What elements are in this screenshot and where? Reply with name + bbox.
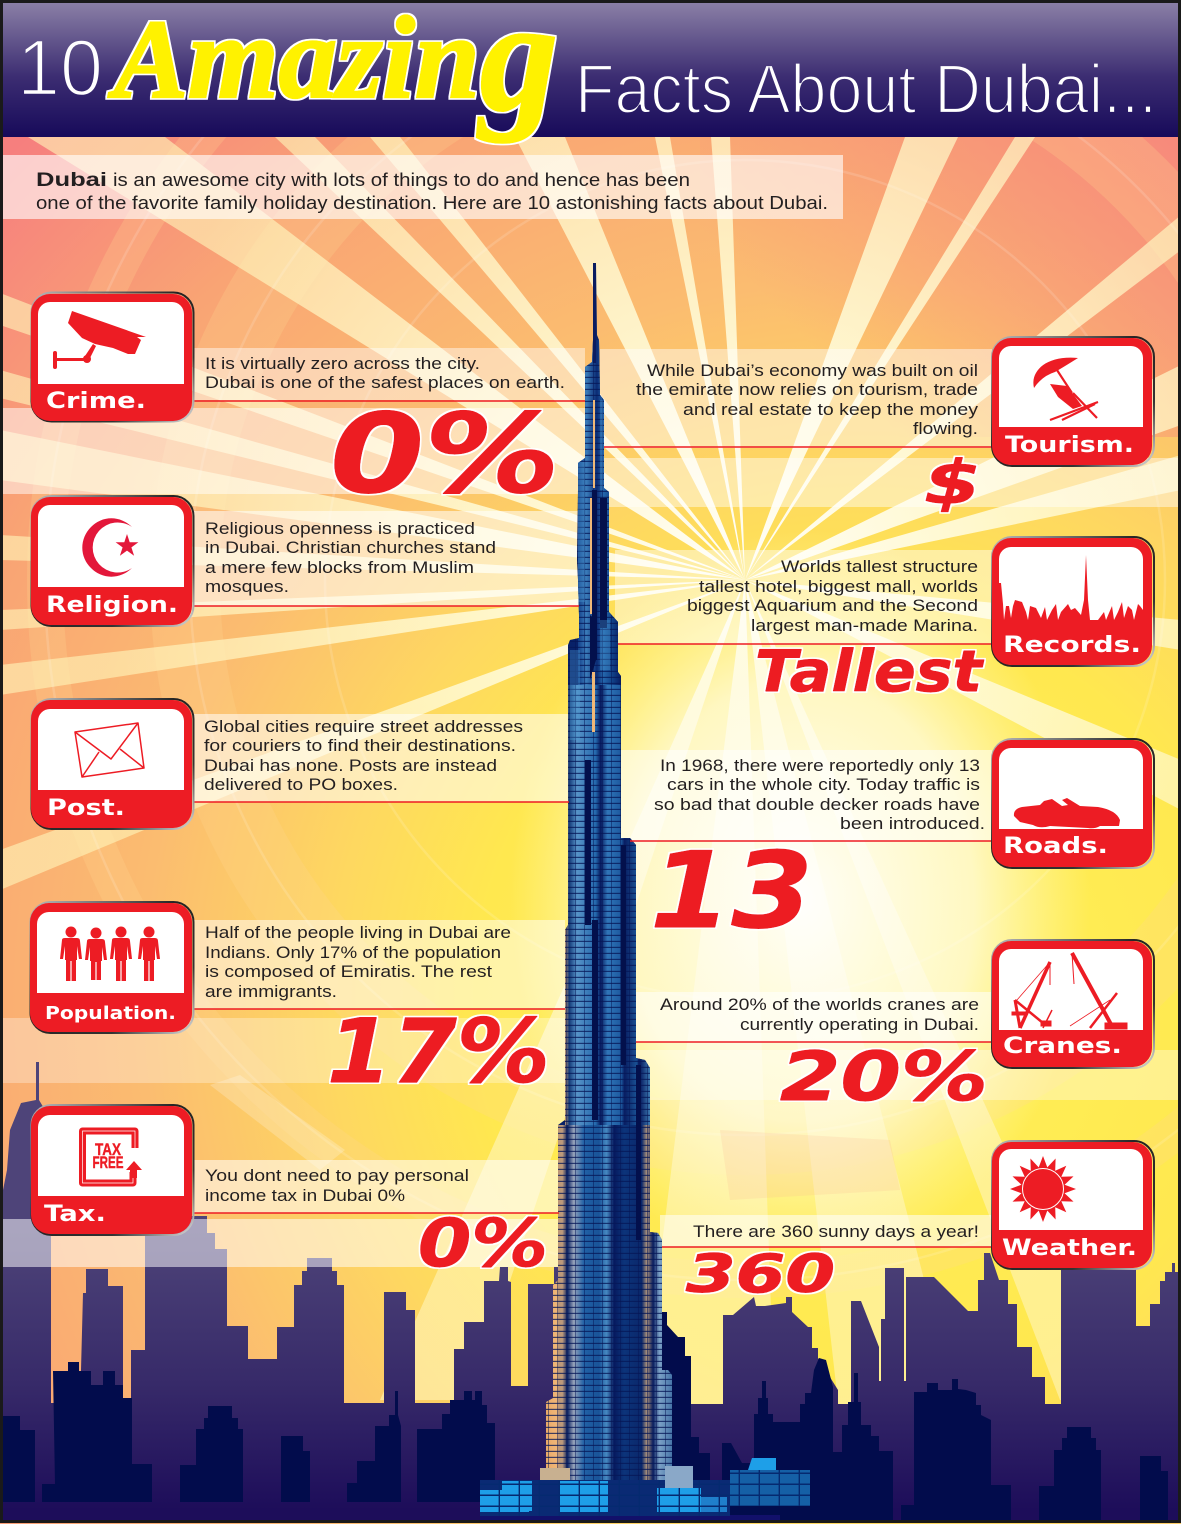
skyline: back buildings [3,1062,1181,1520]
icon: crescent and star [82,518,138,577]
icon: tax free: TAX [95,1140,122,1159]
badge: Tax [31,1105,194,1235]
big number: tourism dollar: $ [924,448,981,518]
post text: for couriers to find their destinations. [204,736,516,755]
crime text [205,354,565,392]
intro text: one of the favorite family holiday destination. Here are 10 astonishing facts about Dubai. [36,192,828,213]
badge: Population [30,902,194,1033]
big number: crime 0%: 0% [330,390,560,518]
records text: biggest Aquarium and the Second [687,596,978,615]
crime text: Dubai is one of the safest places on earth. [205,373,565,392]
title: 10 [17,23,103,112]
icon: beach umbrella and chair [1033,358,1098,420]
icon: convertible car [1014,798,1120,828]
post text: delivered to PO boxes. [204,775,398,794]
big number: tax 0%: 0% [418,1205,548,1282]
badge: Tourism [992,337,1154,466]
translucent text strips [3,155,1181,1247]
icon: tax free [82,1131,142,1183]
tax text: income tax in Dubai 0% [205,1186,405,1205]
title [17,0,1157,144]
label: Roads: Roads. [1003,834,1108,859]
skyline haze band [3,1219,559,1267]
badge: Crime [31,292,194,422]
crime text: It is virtually zero across the city. [205,354,480,373]
label: Records: Records. [1003,633,1141,658]
badge: Religion [31,496,194,626]
post text [204,717,523,794]
population text: Half of the people living in Dubai are [205,923,511,942]
label: Cranes: Cranes. [1003,1034,1122,1059]
label: Religion: Religion. [46,593,178,618]
population text: are immigrants. [205,982,337,1001]
intro text [36,169,828,213]
label: Population: Population. [45,1003,176,1024]
intro text: is an awesome city with lots of things to do and hence has been [113,169,690,190]
badge: Post [31,699,194,829]
tourism text: the emirate now relies on tourism, trade [636,380,978,399]
tower podium and base buildings [480,1458,810,1520]
skyline: front dark buildings [3,1312,1168,1520]
religion text: a mere few blocks from Muslim [205,558,474,577]
roads text: so bad that double decker roads have [654,795,980,814]
icon: sun [1010,1156,1076,1222]
header band [3,3,1178,137]
Burj Khalifa tower [546,263,672,1480]
post text: Global cities require street addresses [204,717,523,736]
religion text: in Dubai. Christian churches stand [205,538,496,557]
tourism text [636,361,979,438]
icon: security camera [53,311,146,369]
icon: four people [60,926,160,981]
roads text [654,756,985,833]
big number: population 17%: 17% [327,1000,550,1103]
big number: records Tallest: Tallest [755,639,984,705]
icon: Dubai skyline [999,555,1143,630]
records text: Worlds tallest structure [781,557,978,576]
tax text: You dont need to pay personal [205,1166,469,1185]
big number: roads 13: 13 [650,830,813,952]
badge: Weather [992,1141,1154,1269]
tourism text: and real estate to keep the money [683,400,979,419]
religion text [205,519,496,596]
big number: cranes 20%: 20% [780,1038,988,1117]
roads text: cars in the whole city. Today traffic is [667,775,980,794]
label: Tourism: Tourism. [1005,433,1134,458]
badge: Roads [992,739,1154,868]
tourism text: flowing. [913,419,978,438]
tax text [205,1166,469,1205]
records text: largest man-made Marina. [751,616,978,635]
label: Crime: Crime. [46,389,146,414]
big number: weather 360: 360 [686,1244,835,1305]
cranes text: Around 20% of the worlds cranes are [660,995,979,1014]
icon: construction cranes [1012,953,1127,1029]
cranes text: currently operating in Dubai. [740,1015,979,1034]
records text: tallest hotel, biggest mall, worlds [699,577,978,596]
badge: Records [992,537,1154,666]
intro text: Dubai [36,170,107,191]
badge: Cranes [992,940,1154,1068]
religion text: mosques. [205,577,289,596]
label: Post: Post. [47,796,125,821]
post text: Dubai has none. Posts are instead [204,756,497,775]
population text: Indians. Only 17% of the population [205,943,501,962]
label: Weather: Weather. [1002,1236,1137,1261]
cranes text [660,995,979,1034]
population text [205,923,511,1001]
roads text: In 1968, there were reportedly only 13 [660,756,980,775]
records text [687,557,978,635]
icon: tax free: FREE [92,1153,124,1172]
population text: is composed of Emiratis. The rest [205,962,492,981]
religion text: Religious openness is practiced [205,519,475,538]
roads text: been introduced. [840,814,985,833]
icon: envelope [75,723,144,777]
label: Tax: Tax. [44,1202,106,1227]
callout rule lines [193,401,992,1247]
weather text: There are 360 sunny days a year! [693,1222,979,1241]
tourism text: While Dubai’s economy was built on oil [647,361,978,380]
